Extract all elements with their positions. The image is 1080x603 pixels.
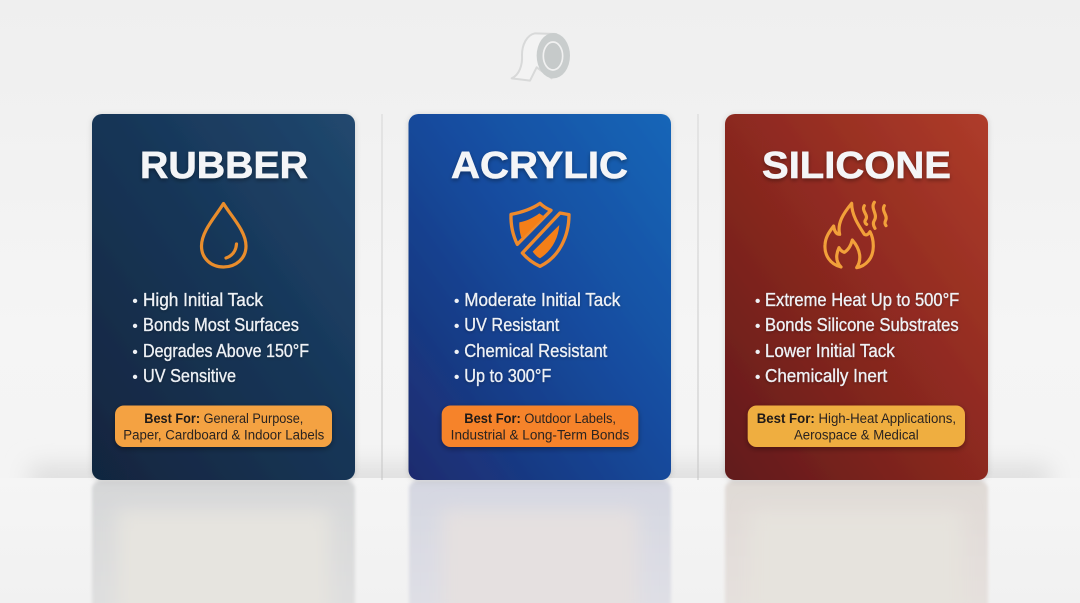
callout: silicone best for: Best For: High-Heat Applications,: [757, 411, 956, 426]
callout: rubber best for: Best For: General Purpose,: [144, 411, 303, 426]
list: silicone properties: Chemically Inert: [765, 366, 887, 386]
icon: water drop: [202, 204, 246, 267]
list: rubber properties: •: [132, 293, 138, 310]
cast shadow on wall: [29, 461, 1051, 478]
list: rubber properties: •: [132, 318, 138, 335]
list: rubber properties: High Initial Tack: [143, 290, 264, 310]
list: silicone properties: [755, 290, 959, 386]
list: acrylic properties: [454, 290, 621, 386]
callout: silicone best for: [748, 406, 965, 447]
callout: acrylic best for: Best For: Outdoor Labels,: [464, 411, 616, 426]
icon: tape roll: [512, 33, 570, 81]
floor: [0, 478, 1080, 603]
list: silicone properties: Extreme Heat Up to 500°F: [765, 290, 959, 310]
heading: rubber: RUBBER: [140, 145, 308, 187]
list: silicone properties: •: [755, 369, 761, 386]
list: acrylic properties: •: [454, 369, 460, 386]
list: acrylic properties: •: [454, 344, 460, 361]
divider lines: [382, 114, 698, 480]
list: acrylic properties: UV Resistant: [464, 315, 559, 335]
panel: rubber: [92, 114, 355, 480]
list: rubber properties: •: [132, 369, 138, 386]
list: silicone properties: •: [755, 318, 761, 335]
reflection: silicone card: [725, 481, 988, 603]
list: rubber properties: UV Sensitive: [143, 366, 236, 386]
reflection: rubber card: [92, 481, 355, 603]
list: silicone properties: Lower Initial Tack: [765, 341, 896, 361]
list: rubber properties: Degrades Above 150°F: [143, 341, 309, 361]
list: acrylic properties: Moderate Initial Tack: [464, 290, 621, 310]
callout: acrylic best for: [442, 406, 638, 447]
list: acrylic properties: •: [454, 318, 460, 335]
list: acrylic properties: Chemical Resistant: [464, 341, 607, 361]
icon: shield: [511, 203, 569, 266]
panel: acrylic: [408, 114, 671, 480]
callout: rubber best for: [115, 406, 332, 447]
list: rubber properties: [132, 290, 309, 386]
list: acrylic properties: •: [454, 293, 460, 310]
reflection: acrylic card: [409, 481, 671, 603]
panel: silicone: [725, 114, 988, 480]
heading: acrylic: ACRYLIC: [451, 145, 628, 187]
callout: acrylic best for: Industrial & Long-Term Bonds: [451, 428, 630, 442]
icon: flame with heat waves: [825, 202, 886, 268]
list: silicone properties: •: [755, 344, 761, 361]
heading: silicone: SILICONE: [762, 145, 951, 187]
list: silicone properties: Bonds Silicone Substrates: [765, 315, 959, 335]
callout: silicone best for: Aerospace & Medical: [794, 428, 919, 442]
callout: rubber best for: Paper, Cardboard & Indoor Labels: [123, 428, 325, 442]
list: rubber properties: Bonds Most Surfaces: [143, 315, 299, 335]
list: rubber properties: •: [132, 344, 138, 361]
list: acrylic properties: Up to 300°F: [464, 366, 551, 386]
list: silicone properties: •: [755, 293, 761, 310]
